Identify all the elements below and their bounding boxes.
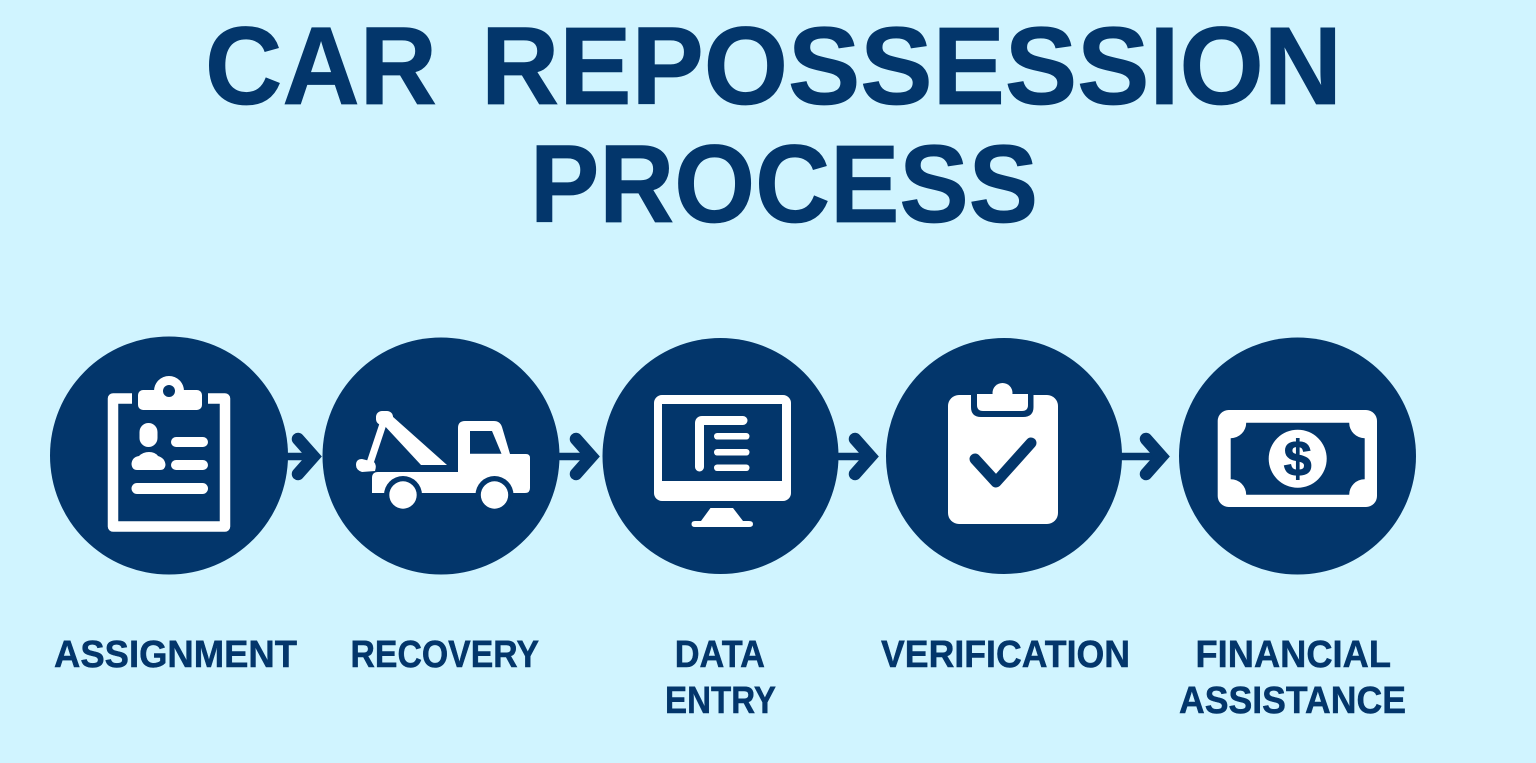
title: PROCESS: [530, 123, 1038, 246]
step 5: financial assistance banknote icon: $: [1284, 431, 1312, 487]
arrow: recovery to data entry: [557, 439, 592, 474]
label: financial assistance: ASSISTANCE: [1179, 680, 1406, 722]
label: assignment: ASSIGNMENT: [54, 634, 297, 676]
label: data entry: DATA: [675, 634, 765, 676]
step 3: data entry monitor icon: [602, 338, 838, 574]
label: verification: VERIFICATION: [881, 634, 1130, 676]
label: data entry: ENTRY: [665, 680, 776, 722]
label: financial assistance: FINANCIAL: [1196, 634, 1391, 676]
step 1: assignment icon: [50, 336, 288, 574]
step 4: verification clipboard icon: [886, 338, 1122, 574]
title: REPOSSESSION: [481, 5, 1342, 128]
title: CAR: [205, 5, 437, 128]
label: recovery: RECOVERY: [350, 634, 539, 676]
label: financial assistance: [1179, 634, 1406, 722]
arrow: verification to financial assistance: [1119, 439, 1162, 474]
label: data entry: [665, 634, 776, 722]
step 5: financial assistance banknote icon: [1179, 338, 1416, 574]
step 2: recovery tow truck icon: [322, 338, 560, 574]
arrow: data entry to verification: [835, 439, 870, 474]
arrow: assignment to recovery: [285, 439, 314, 474]
title: [205, 5, 1342, 246]
